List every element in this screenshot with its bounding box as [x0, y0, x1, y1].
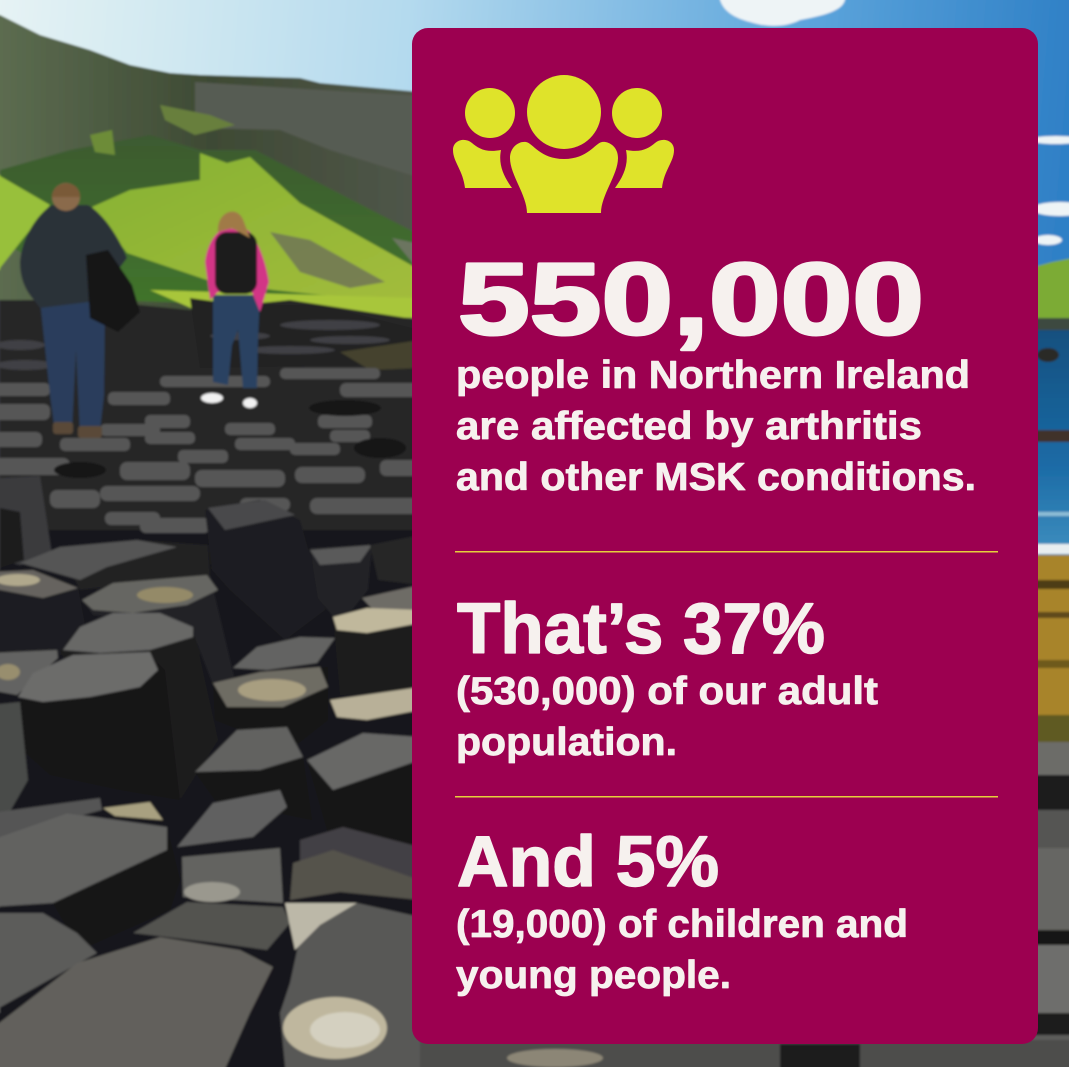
text block: children and young people	[456, 903, 908, 997]
tops and sides, foreground	[60, 540, 210, 590]
person: woman with backpack	[201, 212, 269, 408]
heading: And 5%: And 5%	[457, 823, 719, 902]
text block: adult population	[456, 670, 878, 764]
text block: adult population: (530,000) of our adult	[456, 670, 878, 713]
headline: 550,000: 550,000	[458, 242, 924, 356]
panel	[412, 28, 1038, 1044]
text block: children and young people: young people.	[456, 954, 731, 997]
clouds	[720, 0, 1069, 245]
basalt columns	[0, 476, 420, 1067]
text block: people affected	[456, 354, 976, 499]
person: man with bag	[20, 183, 140, 438]
stone causeway, far field	[0, 300, 420, 530]
icon: group of three people	[453, 75, 674, 213]
text block: people affected: people in Northern Ireland	[456, 354, 970, 397]
text block: people affected: are affected by arthritis	[456, 405, 922, 448]
strip below panel	[405, 1040, 1069, 1067]
text block: people affected: and other MSK conditions.	[456, 456, 976, 499]
heading: That's 37%: That’s 37%	[457, 590, 825, 669]
text block: adult population: population.	[456, 721, 677, 764]
slabs mid field	[0, 368, 420, 533]
right edge: headland, sea, shore	[1030, 255, 1069, 1067]
text block: children and young people: (19,000) of children and	[456, 903, 908, 946]
cliffs	[0, 15, 420, 320]
